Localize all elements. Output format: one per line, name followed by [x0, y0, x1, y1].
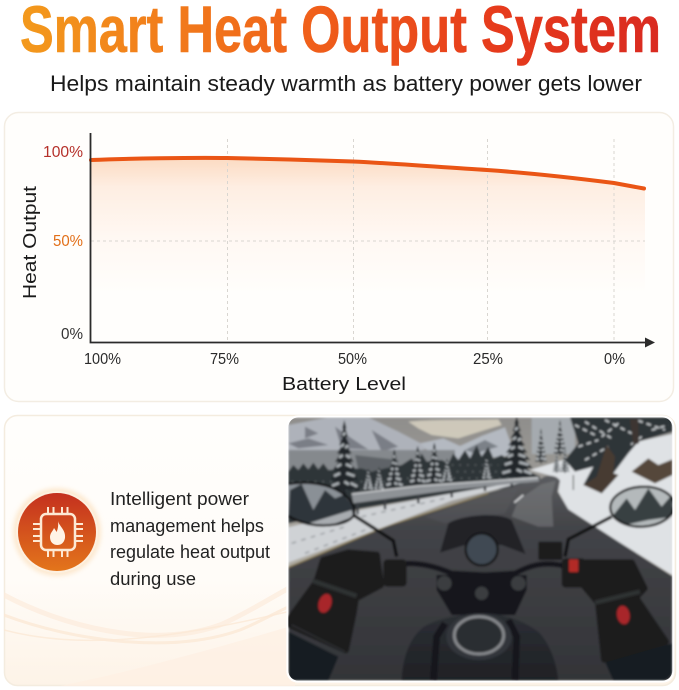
y axis tick labels — [43, 144, 83, 343]
x axis tick labels: 100% — [84, 351, 121, 368]
x axis tick labels: 25% — [473, 351, 503, 368]
subtitle: Helps maintain steady warmth as battery power gets lower — [50, 71, 642, 96]
feature text — [110, 489, 270, 589]
right snow slope — [530, 434, 672, 575]
right mirror — [565, 517, 612, 557]
x axis tick labels: 75% — [210, 351, 239, 368]
windscreen — [440, 515, 526, 554]
x axis tick labels — [84, 351, 625, 368]
feature text: Intelligent power — [110, 489, 249, 509]
feature text: regulate heat output — [110, 542, 270, 562]
chart area fill — [91, 158, 645, 295]
distant forest — [288, 445, 540, 523]
left snow bank — [288, 482, 519, 563]
icon: chip with flame — [13, 488, 101, 576]
heat output line — [91, 158, 644, 188]
road — [288, 476, 672, 681]
left mirror — [353, 515, 397, 557]
right canopy — [565, 417, 672, 493]
panel: heat output chart — [4, 112, 674, 402]
panel: intelligent power management — [4, 416, 676, 686]
decorative waves — [5, 587, 286, 644]
right glove — [605, 643, 672, 681]
feature text: management helps — [110, 516, 264, 536]
left glove — [288, 632, 338, 681]
fork and headlight body — [437, 575, 527, 615]
y axis title: Heat Output — [20, 186, 40, 299]
handlebar — [385, 564, 568, 575]
y axis tick labels: 0% — [61, 326, 83, 343]
mountains — [288, 418, 426, 451]
feature text: during use — [110, 569, 196, 589]
axes — [90, 133, 655, 348]
x axis tick labels: 50% — [338, 351, 367, 368]
guard rail — [352, 478, 539, 503]
fuel tank — [402, 613, 558, 681]
gauge — [466, 533, 498, 565]
x axis title: Battery Level — [282, 374, 406, 394]
valley haze — [288, 450, 455, 473]
y axis tick labels: 50% — [53, 233, 83, 250]
y axis tick labels: 100% — [43, 144, 83, 161]
grid lines — [91, 139, 645, 342]
photo: motorcycle rider on snowy mountain road — [286, 415, 675, 683]
x axis tick labels: 0% — [604, 351, 625, 368]
